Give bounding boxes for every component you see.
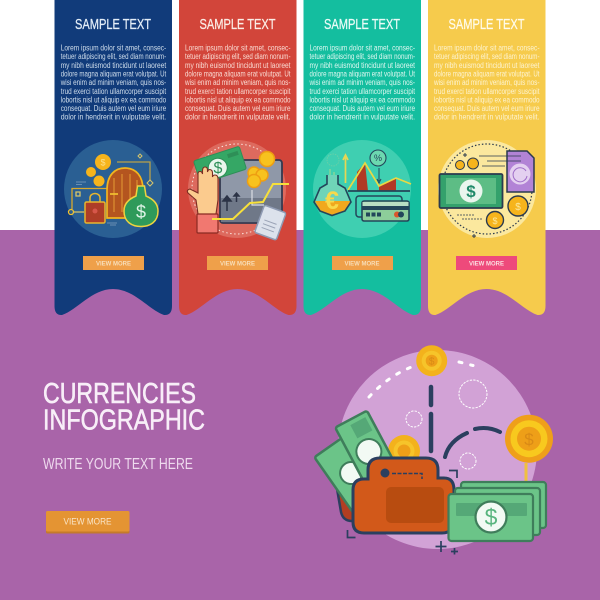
coin: top: $ — [429, 356, 435, 368]
main button — [46, 511, 130, 534]
main button: VIEW MORE — [64, 516, 112, 528]
yellow body text — [433, 44, 540, 122]
red body text: my nibh euismod tincidunt ut laoreet — [185, 61, 291, 70]
icon: euro crucible, chart and cards: € — [325, 187, 339, 215]
blue ribbon shape — [54, 0, 172, 315]
wallet — [353, 458, 454, 533]
icon: hand, banknote, chart screen and document: $ — [214, 160, 223, 177]
dashed flight paths — [369, 362, 500, 469]
red heading: SAMPLE TEXT — [200, 17, 276, 33]
teal heading: SAMPLE TEXT — [324, 17, 400, 33]
red wallet back — [335, 477, 380, 521]
icon: vault door, coins and money bag — [64, 140, 162, 238]
teal button: VIEW MORE — [344, 260, 380, 267]
red body text: lobortis nisl ut aliquip ex ea commodo — [185, 95, 291, 104]
icon: banknote, coins and purple document: $ — [515, 202, 521, 213]
icon: hand, banknote, chart screen and document — [187, 140, 289, 240]
panel: teal — [304, 0, 421, 315]
blue body text: tetuer adipiscing elit, sed diam nonum- — [61, 52, 166, 61]
blue button — [83, 256, 144, 270]
red body text: consequat. Duis autem vel eum iriure — [185, 104, 291, 113]
cash stack — [448, 482, 546, 541]
blue button: VIEW MORE — [96, 260, 131, 267]
red body text: trud exerci tation ullamcorper suscipit — [185, 87, 291, 96]
teal body text: lobortis nisl ut aliquip ex ea commodo — [310, 95, 415, 104]
red ribbon shape — [179, 0, 296, 315]
teal body text: trud exerci tation ullamcorper suscipit — [310, 87, 416, 96]
blue body text: lobortis nisl ut aliquip ex ea commodo — [61, 95, 167, 104]
yellow button — [456, 256, 517, 270]
yellow body text: dolore magna aliquam erat volutpat. Ut — [434, 70, 540, 78]
blue body text: wisi enim ad minim veniam, quis nos- — [60, 78, 166, 87]
red body text: dolor in hendrerit in vulputate velit. — [185, 113, 290, 122]
teal button — [332, 256, 393, 270]
blue body text: trud exerci tation ullamcorper suscipit — [61, 87, 167, 96]
teal body text: dolor in hendrerit in vulputate velit. — [310, 113, 415, 122]
panel: yellow — [428, 0, 546, 315]
blue body text: my nibh euismod tincidunt ut laoreet — [61, 61, 167, 70]
blue body text: dolor in hendrerit in vulputate velit. — [61, 113, 166, 122]
red button — [207, 256, 268, 270]
teal body text — [309, 44, 416, 122]
blue body text — [60, 44, 167, 122]
icon: banknote, coins and purple document: $ — [492, 216, 498, 226]
coin: right — [505, 415, 553, 494]
coin: right: $ — [524, 430, 534, 449]
icon: euro crucible, chart and cards — [313, 140, 411, 238]
yellow body text: trud exerci tation ullamcorper suscipit — [434, 87, 540, 96]
coin: behind wallet — [388, 435, 420, 467]
teal body text: my nibh euismod tincidunt ut laoreet — [310, 61, 416, 70]
teal ribbon shape — [304, 0, 421, 315]
yellow body text: tetuer adipiscing elit, sed diam nonum- — [434, 52, 540, 61]
blue body text: dolore magna aliquam erat volutpat. Ut — [61, 70, 167, 78]
icon: banknote, coins and purple document: $ — [466, 182, 476, 201]
banknote: back left — [314, 435, 386, 515]
panel: blue — [54, 0, 172, 315]
blue body text: Lorem ipsum dolor sit amet, consec- — [61, 44, 166, 52]
red body text: Lorem ipsum dolor sit amet, consec- — [185, 44, 291, 52]
corner marks and plus signs — [348, 470, 458, 554]
icon: euro crucible, chart and cards: % — [374, 153, 382, 163]
yellow body text: consequat. Duis autem vel eum iriure — [434, 104, 540, 113]
red body text: tetuer adipiscing elit, sed diam nonum- — [185, 52, 291, 61]
yellow body text: wisi enim ad minim veniam, quis nos- — [433, 78, 540, 87]
blue heading: SAMPLE TEXT — [75, 17, 151, 33]
banknote: front left — [335, 411, 400, 489]
subtitle: WRITE YOUR TEXT HERE — [43, 456, 193, 473]
teal body text: tetuer adipiscing elit, sed diam nonum- — [310, 52, 415, 61]
cash stack: $ — [485, 504, 498, 530]
coin: top — [416, 345, 447, 376]
title — [43, 378, 205, 436]
teal body text: wisi enim ad minim veniam, quis nos- — [309, 78, 415, 87]
yellow body text: my nibh euismod tincidunt ut laoreet — [434, 61, 540, 70]
yellow body text: lobortis nisl ut aliquip ex ea commodo — [434, 95, 540, 104]
title: CURRENCIES — [43, 378, 196, 410]
illustration: wallet with cash and coins — [314, 345, 553, 554]
yellow ribbon shape — [428, 0, 546, 315]
teal body text: dolore magna aliquam erat volutpat. Ut — [310, 70, 416, 78]
yellow heading: SAMPLE TEXT — [448, 17, 525, 33]
title: INFOGRAPHIC — [43, 404, 205, 436]
yellow body text: dolor in hendrerit in vulputate velit. — [434, 113, 540, 122]
teal body text: Lorem ipsum dolor sit amet, consec- — [310, 44, 415, 52]
blue body text: consequat. Duis autem vel eum iriure — [61, 104, 167, 113]
background: purple lower band — [0, 230, 600, 600]
panel: red — [179, 0, 296, 315]
yellow button: VIEW MORE — [469, 260, 504, 267]
red body text: wisi enim ad minim veniam, quis nos- — [184, 78, 291, 87]
icon: vault door, coins and money bag: $ — [136, 202, 146, 222]
background: white upper band — [0, 0, 600, 230]
lilac circle — [338, 350, 537, 549]
teal body text: consequat. Duis autem vel eum iriure — [310, 104, 415, 113]
red button: VIEW MORE — [220, 260, 255, 267]
icon: vault door, coins and money bag: $ — [100, 158, 106, 168]
icon: banknote, coins and purple document — [438, 140, 536, 238]
red body text: dolore magna aliquam erat volutpat. Ut — [185, 70, 291, 78]
yellow body text: Lorem ipsum dolor sit amet, consec- — [434, 44, 540, 52]
red body text — [184, 44, 291, 122]
